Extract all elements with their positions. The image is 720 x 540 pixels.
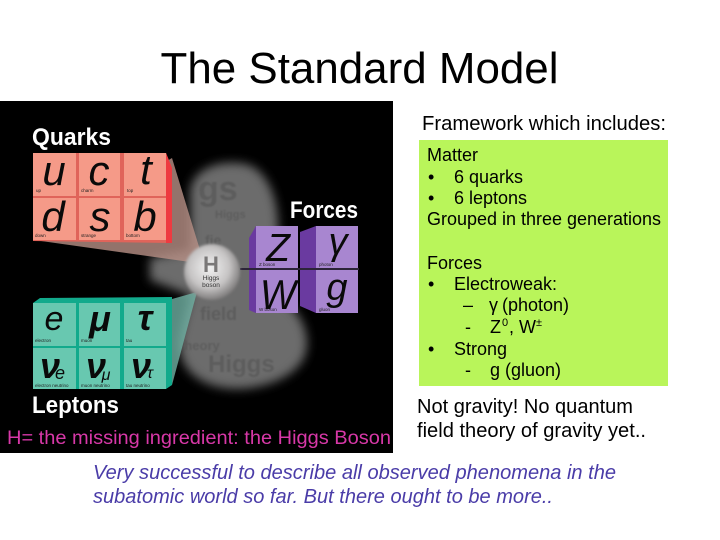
higgs field cloud xyxy=(150,163,307,389)
group: forces xyxy=(240,197,359,318)
icon: higgs boson sphere: boson xyxy=(202,282,220,289)
lepton symbols: μ xyxy=(88,298,111,339)
text: summary xyxy=(93,462,616,508)
icon: higgs boson sphere: H xyxy=(203,252,219,277)
quark names: up xyxy=(36,188,42,193)
text: forces: 0 xyxy=(502,317,508,329)
panel: matter and forces xyxy=(419,140,668,386)
lepton names: muon xyxy=(81,338,93,343)
lepton beam xyxy=(172,292,197,385)
text: forces: Forces xyxy=(427,253,482,273)
text: not gravity: Not gravity! No quantum xyxy=(417,396,633,418)
cloud lettering: field xyxy=(200,304,237,324)
text: matter: 6 quarks xyxy=(454,167,523,187)
lepton names: electron xyxy=(35,338,52,343)
text: matter: 6 leptons xyxy=(454,188,527,208)
icon: higgs boson sphere xyxy=(184,244,240,300)
cloud lettering: gs xyxy=(198,170,238,208)
quark symbols: u xyxy=(42,147,66,194)
text: forces: Strong xyxy=(454,339,507,359)
quark names: bottom xyxy=(126,233,140,238)
group: leptons xyxy=(32,297,172,419)
lepton names: tau xyxy=(126,338,133,343)
text: forces: Electroweak: xyxy=(454,274,557,294)
force symbols: γ xyxy=(328,221,350,263)
lepton symbols: τ xyxy=(138,297,155,338)
force block sides xyxy=(249,226,256,313)
force names: Z boson xyxy=(259,262,276,267)
text: forces: • xyxy=(428,339,434,359)
panel: particle diagram xyxy=(0,101,393,453)
lepton symbols: μ xyxy=(101,367,111,384)
text: forces xyxy=(427,253,569,380)
force names: gluon xyxy=(319,307,331,312)
text: matter: Grouped in three generations xyxy=(427,209,661,229)
text: framework heading: Framework which includes: xyxy=(422,113,666,135)
quark symbols: b xyxy=(133,193,157,240)
quark names: charm xyxy=(81,188,94,193)
lepton symbols xyxy=(40,297,155,386)
force names: W boson xyxy=(259,307,277,312)
cloud lettering: fie xyxy=(205,232,222,248)
lepton names: muon neutrino xyxy=(81,383,110,388)
quark symbols xyxy=(41,146,157,240)
heading: quarks: Quarks xyxy=(32,124,111,151)
quark symbols: c xyxy=(88,147,110,194)
lepton symbols: τ xyxy=(147,365,154,382)
quark beam xyxy=(34,158,200,262)
lepton symbols: ν xyxy=(86,345,106,386)
heading: leptons: Leptons xyxy=(32,392,119,419)
heading: forces: Forces xyxy=(290,197,358,224)
cloud lettering: Higgs xyxy=(208,351,275,378)
force names: photon xyxy=(319,262,333,267)
force symbols xyxy=(260,221,350,318)
quark symbols: t xyxy=(140,146,154,193)
quark symbols: s xyxy=(90,193,110,240)
text: not gravity: field theory of gravity yet.. xyxy=(417,420,646,442)
lepton symbols: ν xyxy=(40,345,60,386)
cloud lettering xyxy=(180,170,275,378)
text: forces: – xyxy=(463,295,473,315)
text: summary: subatomic world so far. But there ought to be more.. xyxy=(93,486,553,508)
lepton block xyxy=(33,297,172,389)
text: forces: Z xyxy=(490,317,501,337)
lepton names: electron neutrino xyxy=(35,383,69,388)
lepton symbols: e xyxy=(45,300,63,338)
force symbols: W xyxy=(260,271,299,318)
text: forces: - xyxy=(465,360,471,380)
text: forces: γ xyxy=(489,295,498,315)
text: forces: • xyxy=(428,274,434,294)
quark block xyxy=(33,153,172,243)
text: forces: , W xyxy=(509,317,536,337)
group: quarks xyxy=(32,124,172,243)
quark symbols: d xyxy=(41,193,66,240)
quark tiles xyxy=(33,153,166,240)
quark names: top xyxy=(127,188,134,193)
caption: higgs boson: H= the missing ingredient: the Higgs Boson xyxy=(7,428,391,449)
force names xyxy=(259,262,333,312)
cloud lettering: theory xyxy=(180,338,220,353)
quark names: strange xyxy=(81,233,97,238)
force tiles xyxy=(256,226,358,313)
cloud lettering: Higgs xyxy=(215,209,246,221)
force symbols: Z xyxy=(265,227,291,270)
icon: higgs boson sphere: Higgs xyxy=(203,275,220,282)
title: The Standard Model xyxy=(160,44,558,93)
quark names: down xyxy=(35,233,46,238)
lepton symbols: e xyxy=(55,363,65,383)
lepton tiles xyxy=(33,303,166,389)
text: summary: Very successful to describe all observed phenomena in the xyxy=(93,462,616,484)
text: forces: g (gluon) xyxy=(490,360,561,380)
lepton names xyxy=(35,338,150,388)
text: matter: • xyxy=(428,167,434,187)
text: forces: - xyxy=(465,317,471,337)
text: matter: Matter xyxy=(427,145,478,165)
text: forces: (photon) xyxy=(502,295,569,315)
lepton names: tau neutrino xyxy=(126,383,150,388)
text: not gravity xyxy=(417,396,646,442)
force symbols: g xyxy=(326,267,348,309)
text: forces: ± xyxy=(536,317,542,329)
quark names xyxy=(35,188,140,238)
text: matter: • xyxy=(428,188,434,208)
text: matter xyxy=(427,145,661,229)
lepton symbols: ν xyxy=(131,345,151,386)
